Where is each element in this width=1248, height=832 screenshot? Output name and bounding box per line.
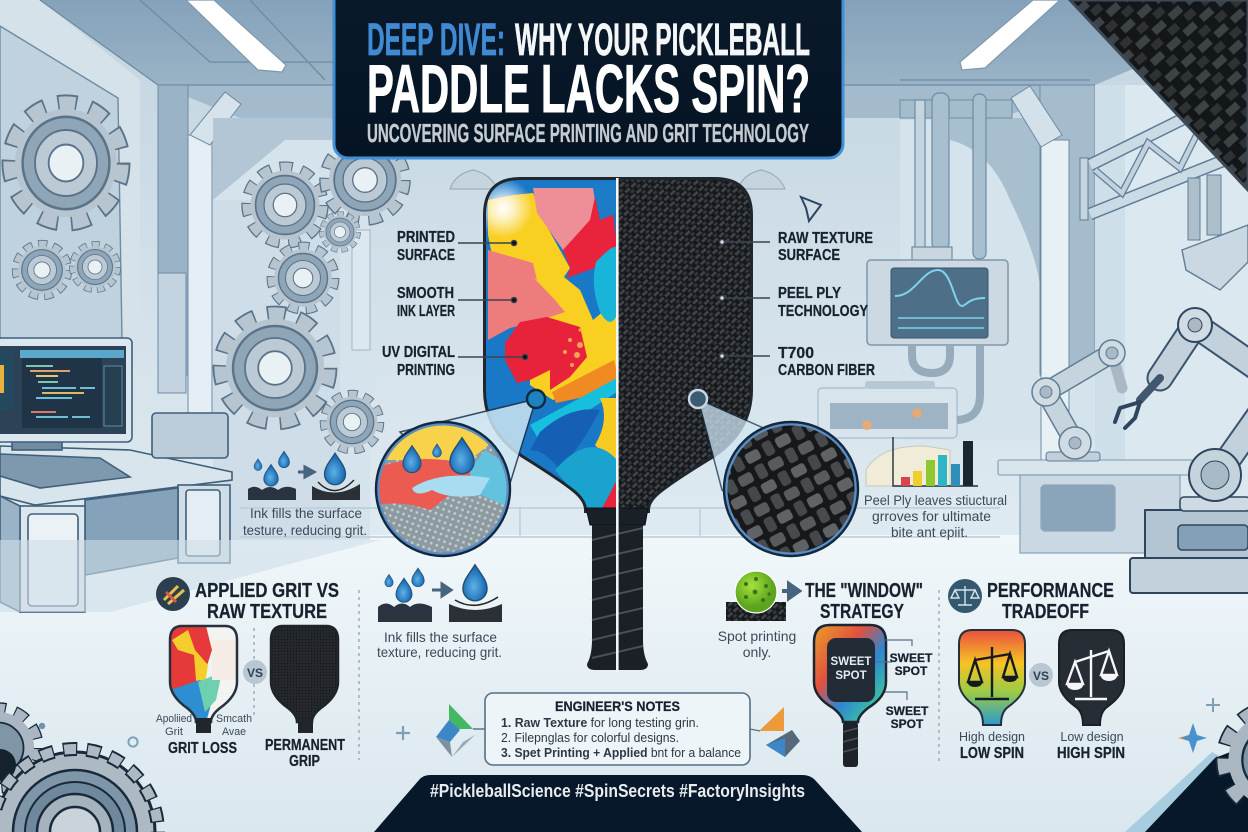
pipes bbox=[912, 93, 986, 261]
window paddle: SPOT bbox=[835, 670, 867, 682]
label: high spin bbox=[1057, 730, 1125, 762]
upper ink caption: testure, reducing grit. bbox=[243, 522, 367, 538]
label: raw texture surface bbox=[778, 230, 873, 264]
printed half bbox=[486, 180, 616, 508]
sweet spot callouts: SPOT bbox=[895, 664, 928, 678]
heading bbox=[987, 580, 1114, 623]
title panel bbox=[334, 0, 843, 158]
panel: applied grit vs raw texture bbox=[156, 577, 345, 770]
hashtag footer bbox=[374, 775, 862, 832]
left wall panel bbox=[0, 26, 122, 340]
large robot arm bbox=[1115, 308, 1248, 593]
icon: logo mark bbox=[801, 197, 821, 221]
label: smooth ink layer: INK LAYER bbox=[397, 303, 455, 320]
salmon left bbox=[488, 250, 565, 340]
sweet spot callouts bbox=[875, 640, 933, 731]
vs badge bbox=[1029, 663, 1053, 687]
icon: left origami mark bbox=[436, 704, 485, 757]
notes list: 1. Raw Texture for long testing grin. bbox=[501, 715, 699, 730]
left column bbox=[158, 85, 370, 540]
corner gears bottom left bbox=[0, 708, 158, 832]
leader lines right bbox=[720, 240, 770, 358]
glare on printed surface bbox=[486, 180, 532, 237]
floor shadow bbox=[0, 540, 380, 612]
peel ply caption: grroves for ultimate bbox=[872, 508, 991, 524]
sweet spot callouts: SPOT bbox=[891, 717, 924, 731]
label: uv digital printing: UV DIGITAL bbox=[382, 344, 455, 361]
paddle grip bbox=[587, 525, 648, 670]
ink caption: Ink fills the surface bbox=[384, 629, 497, 645]
peel ply caption: Peel Ply leaves stiuctural bbox=[864, 492, 1007, 508]
small paddle notes bbox=[156, 713, 252, 738]
computer monitor bbox=[0, 346, 126, 434]
vs badge: VS bbox=[247, 666, 263, 680]
peel ply caption bbox=[864, 492, 1007, 540]
leader lines left bbox=[458, 240, 528, 360]
label: raw texture surface: SURFACE bbox=[778, 247, 840, 264]
window paddle: SWEET bbox=[831, 656, 871, 668]
blue corner bbox=[598, 211, 614, 220]
label: peel ply technology bbox=[778, 285, 868, 320]
notes list bbox=[501, 715, 741, 760]
truss bbox=[1080, 118, 1248, 290]
heading: APPLIED GRIT VS bbox=[195, 580, 339, 602]
icon: pickleball on surface bbox=[726, 571, 786, 621]
cyan right bbox=[594, 247, 617, 322]
label: permanent grip: PERMANENT bbox=[265, 737, 345, 754]
label: permanent grip: GRIP bbox=[289, 753, 320, 770]
center divider bbox=[616, 178, 619, 672]
small paddle notes: Avae bbox=[222, 726, 246, 738]
paddle: low design bbox=[1059, 630, 1124, 725]
small robot arm bbox=[1032, 340, 1125, 461]
upper ink caption bbox=[243, 505, 367, 538]
paddle: applied grit bbox=[170, 626, 237, 733]
right magnifier bbox=[689, 390, 858, 556]
paddle collar bbox=[586, 508, 648, 525]
label: t700 carbon fiber: CARBON FIBER bbox=[778, 362, 875, 379]
caption bbox=[718, 628, 796, 660]
heading bbox=[805, 580, 923, 623]
label: t700 carbon fiber bbox=[778, 345, 875, 379]
panel: performance tradeoff bbox=[948, 579, 1125, 762]
heading: STRATEGY bbox=[820, 601, 905, 623]
label: printed surface: SURFACE bbox=[397, 247, 455, 264]
pink highlight bbox=[533, 188, 597, 250]
heading bbox=[195, 580, 339, 623]
paddle: high design bbox=[959, 630, 1025, 725]
left room gears bbox=[10, 104, 405, 450]
vs badge bbox=[243, 660, 267, 684]
main paddle bbox=[473, 175, 757, 672]
carbon fiber corner bbox=[1070, 0, 1248, 190]
decorative plus bbox=[396, 726, 410, 740]
baseboard bbox=[240, 508, 1000, 537]
hashtag footer: #PickleballScience #SpinSecrets #FactoryInsights bbox=[430, 781, 805, 801]
red top bbox=[563, 197, 617, 278]
sweet spot callouts: SWEET bbox=[886, 704, 929, 718]
vs badge: VS bbox=[1033, 669, 1049, 683]
corner accent bottom right bbox=[1125, 745, 1248, 832]
panel: window strategy bbox=[718, 571, 933, 767]
computer desk bbox=[0, 338, 232, 612]
arrow bbox=[782, 584, 799, 598]
right workbench bbox=[998, 460, 1193, 553]
paddle: raw texture bbox=[271, 626, 338, 733]
heading: THE "WINDOW" bbox=[805, 580, 923, 602]
control panel on right wall bbox=[867, 260, 1008, 420]
heading: TRADEOFF bbox=[1002, 601, 1089, 623]
label: grit loss: GRIT LOSS bbox=[168, 740, 237, 757]
peel ply caption: bite ant epiit. bbox=[891, 524, 968, 540]
label: smooth ink layer: SMOOTH bbox=[397, 285, 454, 302]
yellow flame bbox=[488, 193, 617, 400]
label: uv digital printing: PRINTING bbox=[397, 362, 455, 379]
label: peel ply technology: PEEL PLY bbox=[778, 285, 841, 302]
ceiling light left bbox=[186, 0, 286, 72]
bar chart bbox=[866, 437, 978, 486]
icon: scale badge bbox=[948, 579, 982, 613]
label: smooth ink layer bbox=[397, 285, 455, 320]
ceiling lamps bbox=[450, 170, 785, 189]
caption: only. bbox=[743, 644, 771, 660]
small paddle notes: Smcath bbox=[216, 713, 252, 725]
ceiling light right bbox=[960, 0, 1060, 70]
label: low spin: LOW SPIN bbox=[960, 745, 1024, 762]
notes list: 2. Filepnglas for colorful designs. bbox=[501, 730, 679, 745]
notes heading: ENGINEER'S NOTES bbox=[555, 698, 680, 714]
small paddle notes: Grit bbox=[165, 726, 183, 738]
caption: Spot printing bbox=[718, 628, 796, 644]
subtitle: UNCOVERING SURFACE PRINTING AND GRIT TECHNOLOGY bbox=[367, 118, 809, 148]
label: low spin bbox=[959, 730, 1025, 762]
ink process diagram bbox=[378, 565, 502, 622]
ink caption: texture, reducing grit. bbox=[377, 644, 502, 660]
label: printed surface bbox=[397, 229, 455, 264]
ink caption bbox=[377, 629, 502, 660]
label: permanent grip bbox=[265, 737, 345, 770]
window paddle bbox=[814, 625, 886, 767]
icon: grit badge bbox=[156, 577, 190, 611]
notes box bbox=[485, 693, 750, 765]
small paddle notes: Apoliied bbox=[156, 713, 192, 725]
lower yellow bbox=[595, 398, 616, 459]
heading: PERFORMANCE bbox=[987, 580, 1114, 602]
machine on back wall bbox=[818, 381, 957, 438]
ceiling bbox=[0, 0, 1135, 340]
label: printed surface: PRINTED bbox=[397, 229, 455, 246]
orange band bbox=[552, 360, 617, 403]
label: high spin: HIGH SPIN bbox=[1057, 745, 1125, 762]
label: high spin: Low design bbox=[1060, 730, 1124, 744]
decorative sparkle bbox=[1178, 698, 1220, 753]
title line 1: WHY YOUR PICKLEBALL bbox=[515, 14, 810, 65]
label: peel ply technology: TECHNOLOGY bbox=[778, 303, 868, 320]
corner gear bottom right bbox=[1224, 708, 1248, 812]
label: raw texture surface: RAW TEXTURE bbox=[778, 230, 873, 247]
lower teal bbox=[555, 447, 617, 512]
cyan band bbox=[530, 378, 617, 442]
engineer's notes bbox=[485, 693, 750, 765]
label: t700 carbon fiber: T700 bbox=[778, 345, 814, 362]
title line 1 bbox=[367, 14, 810, 65]
ink droplets bbox=[403, 438, 474, 474]
upper ink process diagram bbox=[248, 451, 360, 500]
heading: RAW TEXTURE bbox=[207, 601, 327, 623]
right wall and column bbox=[900, 85, 1248, 460]
sweet spot callouts: SWEET bbox=[890, 651, 933, 665]
decorative dots bbox=[39, 723, 138, 747]
paddle frame bbox=[486, 180, 750, 510]
icon: right origami mark bbox=[750, 707, 800, 757]
dark blue sweep bbox=[530, 409, 600, 470]
right callouts bbox=[720, 197, 875, 379]
red blob bbox=[505, 317, 587, 390]
label: low spin: High design bbox=[959, 730, 1025, 744]
title line 1: DEEP DIVE: bbox=[367, 14, 505, 65]
left magnifier bbox=[375, 390, 545, 560]
vs divider bbox=[253, 628, 255, 715]
upper ink caption: Ink fills the surface bbox=[250, 505, 362, 521]
carbon fiber half bbox=[617, 175, 757, 515]
left callouts bbox=[382, 229, 528, 379]
label: uv digital printing bbox=[382, 344, 455, 379]
title line 2: PADDLE LACKS SPIN? bbox=[367, 51, 810, 127]
notes list: 3. Spet Printing + Applied bnt for a balance bbox=[501, 745, 741, 760]
